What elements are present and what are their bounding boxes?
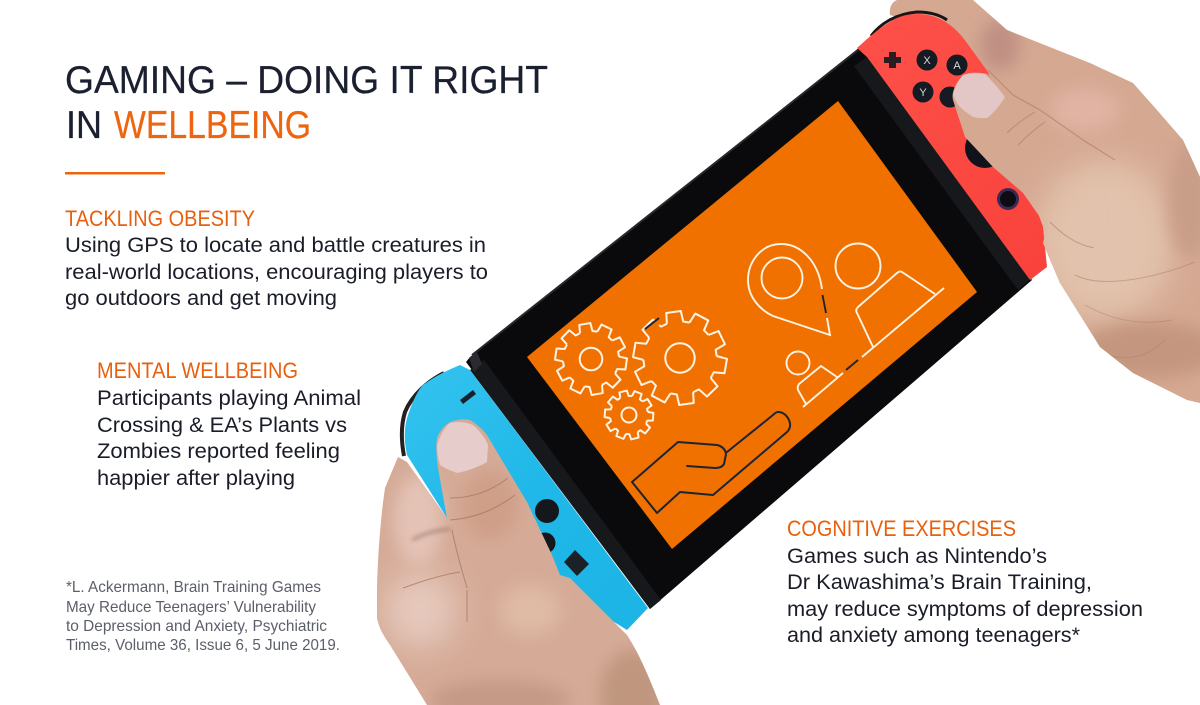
Y button [912, 82, 934, 102]
footnote [66, 579, 340, 654]
home button [997, 188, 1019, 210]
text block: mental wellbeing: Crossing & EA’s Plants vs [97, 414, 347, 437]
text block: cognitive exercises: COGNITIVE EXERCISES [787, 516, 1016, 541]
crease between index finger and thumb [988, 70, 1115, 160]
text block: mental wellbeing: MENTAL WELLBEING [97, 358, 298, 383]
X button: X [923, 55, 931, 67]
footnote: Times, Volume 36, Issue 6, 5 June 2019. [66, 637, 340, 654]
footnote: May Reduce Teenagers’ Vulnerability [66, 599, 316, 616]
button [534, 532, 556, 554]
blue joy-con [402, 365, 648, 630]
left bezel band [470, 360, 661, 609]
right bezel band [854, 57, 1030, 290]
X button [916, 50, 938, 70]
title: IN [66, 104, 102, 147]
text block: cognitive exercises: Dr Kawashima’s Brain Training, [787, 571, 1092, 594]
text block: tackling obesity: Using GPS to locate and battle creatures in [65, 234, 486, 257]
footnote: *L. Ackermann, Brain Training Games [66, 579, 321, 596]
thumbnail [437, 422, 488, 473]
text block: mental wellbeing [97, 358, 361, 490]
text block: tackling obesity: TACKLING OBESITY [65, 206, 255, 231]
B button [940, 86, 960, 108]
A button [946, 54, 968, 76]
footnote: to Depression and Anxiety, Psychiatric [66, 618, 327, 635]
left hand with thumb [370, 415, 670, 705]
title: GAMING – DOING IT RIGHT [65, 59, 548, 102]
analog stick [965, 128, 1005, 168]
screen icon: small person [786, 352, 843, 407]
text block: cognitive exercises: may reduce symptoms of depression [787, 598, 1143, 621]
text block: tackling obesity [65, 206, 488, 310]
screen icon: gears [551, 302, 734, 442]
A button: A [953, 60, 961, 72]
text block: cognitive exercises: Games such as Nintendo’s [787, 545, 1047, 568]
text block: cognitive exercises [787, 516, 1143, 647]
red joy-con [857, 12, 1047, 280]
screen icon: open hand [632, 412, 790, 513]
title: WELLBEING [114, 104, 311, 147]
text block: mental wellbeing: Participants playing Animal [97, 387, 361, 410]
analog stick [535, 499, 559, 523]
Y button: Y [919, 87, 927, 99]
screen icon: map pin [748, 244, 830, 335]
text block: tackling obesity: real-world locations, encouraging players to [65, 261, 488, 284]
console body [466, 47, 1032, 609]
orange rule [65, 172, 165, 174]
text block: cognitive exercises: and anxiety among teenagers* [787, 624, 1080, 647]
text block: tackling obesity: go outdoors and get moving [65, 287, 337, 310]
capture button [564, 550, 589, 576]
plus button [884, 52, 901, 68]
text block: mental wellbeing: happier after playing [97, 467, 295, 490]
screen [527, 101, 977, 549]
slot [460, 390, 476, 404]
right hand behind console [880, 0, 1200, 410]
right hand thumb [952, 72, 1094, 283]
title [65, 59, 548, 147]
text block: mental wellbeing: Zombies reported feeling [97, 440, 340, 463]
screen icon: large person [836, 244, 944, 370]
thumbnail [953, 73, 1005, 118]
